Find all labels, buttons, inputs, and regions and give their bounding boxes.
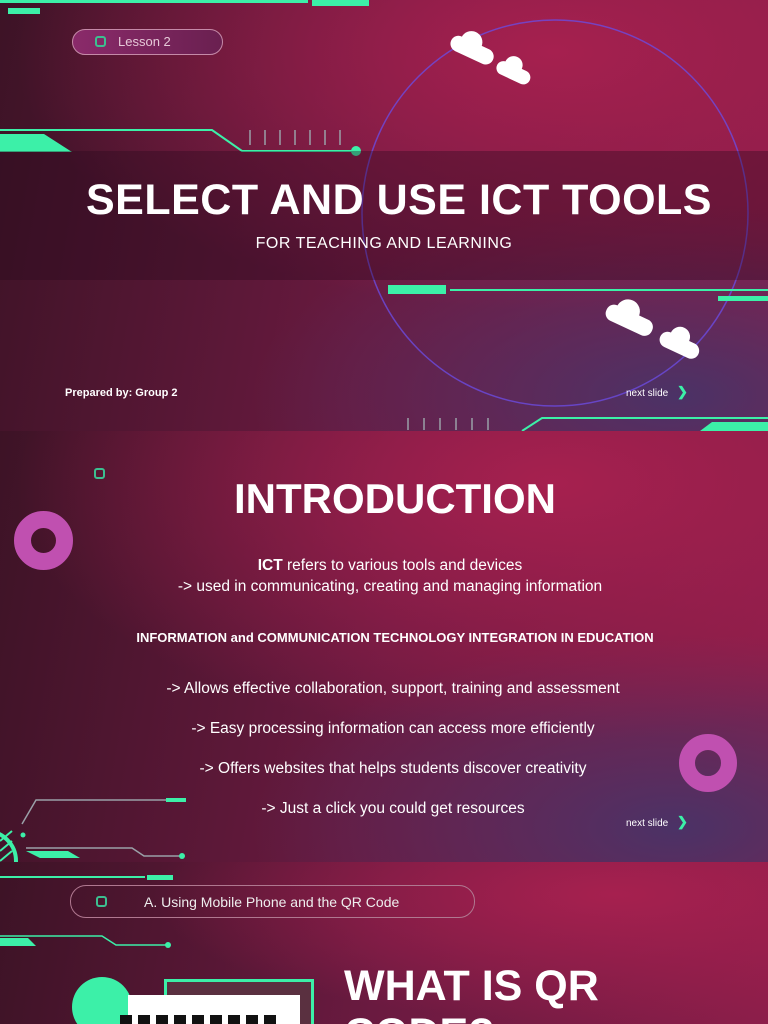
- title band: [0, 151, 768, 280]
- heading: WHAT IS QR: [344, 962, 599, 1010]
- bullet list: [166, 680, 620, 817]
- lesson pill: [72, 29, 223, 55]
- pill text: A. Using Mobile Phone and the QR Code: [144, 894, 399, 910]
- icon: clouds bottom: [606, 299, 700, 359]
- bullet list: -> Just a click you could get resources: [261, 800, 525, 817]
- icon: robot: [95, 36, 106, 47]
- definition text: -> used in communicating, creating and managing information: [178, 578, 602, 595]
- decorative circle: [361, 19, 749, 407]
- definition text: ICT refers to various tools and devices: [258, 557, 522, 574]
- subtitle: FOR TEACHING AND LEARNING: [256, 235, 512, 252]
- top circuit: [0, 876, 145, 878]
- bullet list: -> Easy processing information can access more efficiently: [191, 720, 595, 737]
- QR code graphic: [72, 977, 314, 1024]
- decorative top lines: [0, 0, 308, 3]
- slide 1: title: [0, 0, 768, 431]
- icon: robot: [96, 896, 107, 907]
- bottom-left circuit: [0, 798, 186, 862]
- slide 3: QR code: [0, 862, 768, 1024]
- circuit line left: [0, 129, 361, 156]
- icon: robot: [94, 468, 105, 479]
- bullet list: -> Offers websites that helps students discover creativity: [200, 760, 586, 777]
- definition text: [178, 557, 602, 595]
- title: SELECT AND USE ICT TOOLS: [86, 176, 712, 224]
- bullet list: -> Allows effective collaboration, support, training and assessment: [166, 680, 620, 697]
- slide 2: introduction: [0, 431, 768, 862]
- subheading: INFORMATION and COMMUNICATION TECHNOLOGY INTEGRATION IN EDUCATION: [136, 630, 654, 645]
- icon: ring right: [679, 734, 737, 792]
- section pill: [70, 885, 475, 918]
- heading: INTRODUCTION: [234, 475, 556, 522]
- pill text: Lesson 2: [118, 34, 171, 49]
- next slide: next slide ❯: [626, 384, 688, 399]
- icon: clouds top: [450, 31, 530, 84]
- next slide: next slide ❯: [626, 814, 688, 829]
- bottom circuit: [407, 417, 768, 431]
- prepared by: Prepared by: Group 2: [65, 387, 177, 399]
- circuit line right: [388, 285, 446, 294]
- icon: ring left: [14, 511, 73, 570]
- circuit: [0, 935, 171, 948]
